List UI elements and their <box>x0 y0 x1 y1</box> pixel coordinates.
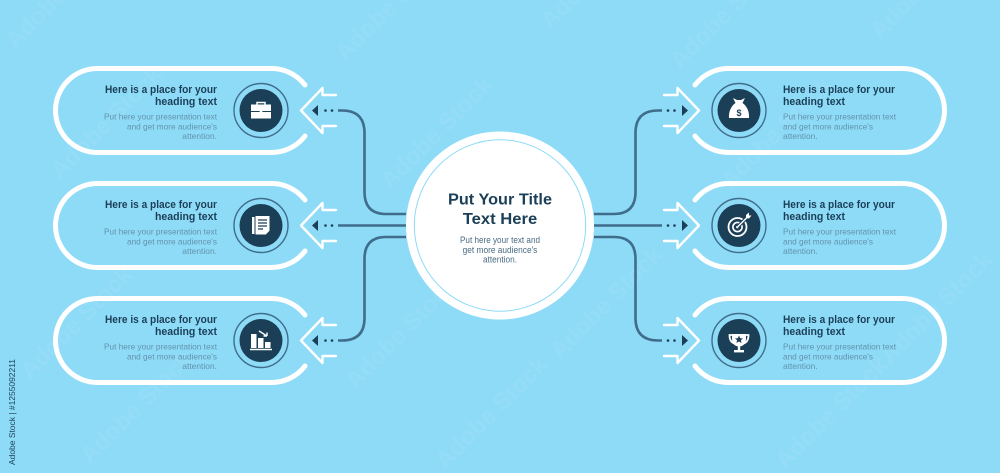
icon: documents <box>234 198 288 252</box>
icon: falling bar chart <box>234 314 288 368</box>
heading <box>783 84 896 108</box>
icon: briefcase <box>234 84 288 138</box>
panel: left item 3 <box>56 298 336 383</box>
text block: and get more audience's <box>127 121 217 131</box>
infographic canvas: Adobe Stock <box>715 71 838 194</box>
text block: attention. <box>783 246 818 256</box>
text block: Put here your presentation text <box>104 342 218 352</box>
heading: Here is a place for your <box>783 314 896 326</box>
text block: and get more audience's <box>783 351 873 361</box>
heading: heading text <box>783 326 845 338</box>
heading: Here is a place for your <box>105 314 218 326</box>
text block: attention. <box>783 361 818 371</box>
infographic canvas: Adobe Stock <box>430 351 553 473</box>
infographic canvas: Adobe Stock <box>45 61 168 184</box>
panel: right item 1 <box>664 68 945 153</box>
heading <box>105 84 218 108</box>
heading: heading text <box>155 96 217 108</box>
heading: heading text <box>783 211 845 223</box>
arrow <box>301 318 336 363</box>
infographic canvas: Adobe Stock <box>340 271 463 394</box>
connector lines: right <box>594 110 662 340</box>
panel: right item 3 <box>664 298 945 383</box>
heading: Here is a place for your <box>105 199 218 211</box>
heading: heading text <box>155 326 217 338</box>
heading: heading text <box>155 211 217 223</box>
connector lines: left <box>338 110 406 340</box>
heading <box>105 199 218 223</box>
icon: target <box>712 198 766 252</box>
infographic canvas: Adobe Stock <box>15 261 138 384</box>
text block <box>783 226 897 256</box>
text block: and get more audience's <box>783 236 873 246</box>
central text: Put here your text and <box>460 235 540 245</box>
text block: and get more audience's <box>783 121 873 131</box>
text block: attention. <box>783 131 818 141</box>
arrow <box>301 203 336 248</box>
heading: heading text <box>783 96 845 108</box>
text block: attention. <box>182 361 217 371</box>
text block <box>783 342 897 371</box>
panel: left item 1 <box>56 68 336 153</box>
heading <box>783 314 896 338</box>
text block: attention. <box>182 131 217 141</box>
heading: Here is a place for your <box>783 199 896 211</box>
text block: Put here your presentation text <box>783 112 897 122</box>
infographic canvas: Adobe Stock <box>75 346 198 469</box>
text block: and get more audience's <box>127 236 217 246</box>
text block: Put here your presentation text <box>783 342 897 352</box>
text block <box>104 226 218 256</box>
arrow <box>301 88 336 133</box>
arrow <box>664 203 699 248</box>
icon: money bag <box>712 84 766 138</box>
text block: Put here your presentation text <box>104 226 218 236</box>
central text: attention. <box>483 254 517 264</box>
text block: attention. <box>182 246 217 256</box>
infographic canvas: Adobe Stock <box>770 351 893 473</box>
heading <box>105 314 218 338</box>
central text <box>460 235 540 264</box>
heading <box>783 199 896 223</box>
central title: Text Here <box>463 211 538 228</box>
central title <box>448 192 552 228</box>
icon: money bag: $ <box>736 108 742 118</box>
arrow <box>664 88 699 133</box>
infographic canvas: Adobe Stock <box>875 246 998 369</box>
text block <box>104 342 218 371</box>
heading: Here is a place for your <box>105 84 218 96</box>
panel: right item 2 <box>664 183 945 268</box>
central text: get more audience's <box>463 245 538 255</box>
heading: Here is a place for your <box>783 84 896 96</box>
text block: Put here your presentation text <box>783 226 897 236</box>
text block <box>783 112 897 141</box>
arrow <box>664 318 699 363</box>
central title: Put Your Title <box>448 192 552 208</box>
text block <box>104 112 218 141</box>
text block: Put here your presentation text <box>104 112 218 122</box>
icon: trophy <box>712 314 766 368</box>
central circle <box>406 132 594 320</box>
panel: left item 2 <box>56 183 336 268</box>
text block: and get more audience's <box>127 351 217 361</box>
infographic canvas: Adobe Stock <box>375 71 498 194</box>
infographic canvas: Adobe Stock <box>545 241 668 364</box>
stock id text: Adobe Stock | #1255092211 <box>7 359 17 465</box>
